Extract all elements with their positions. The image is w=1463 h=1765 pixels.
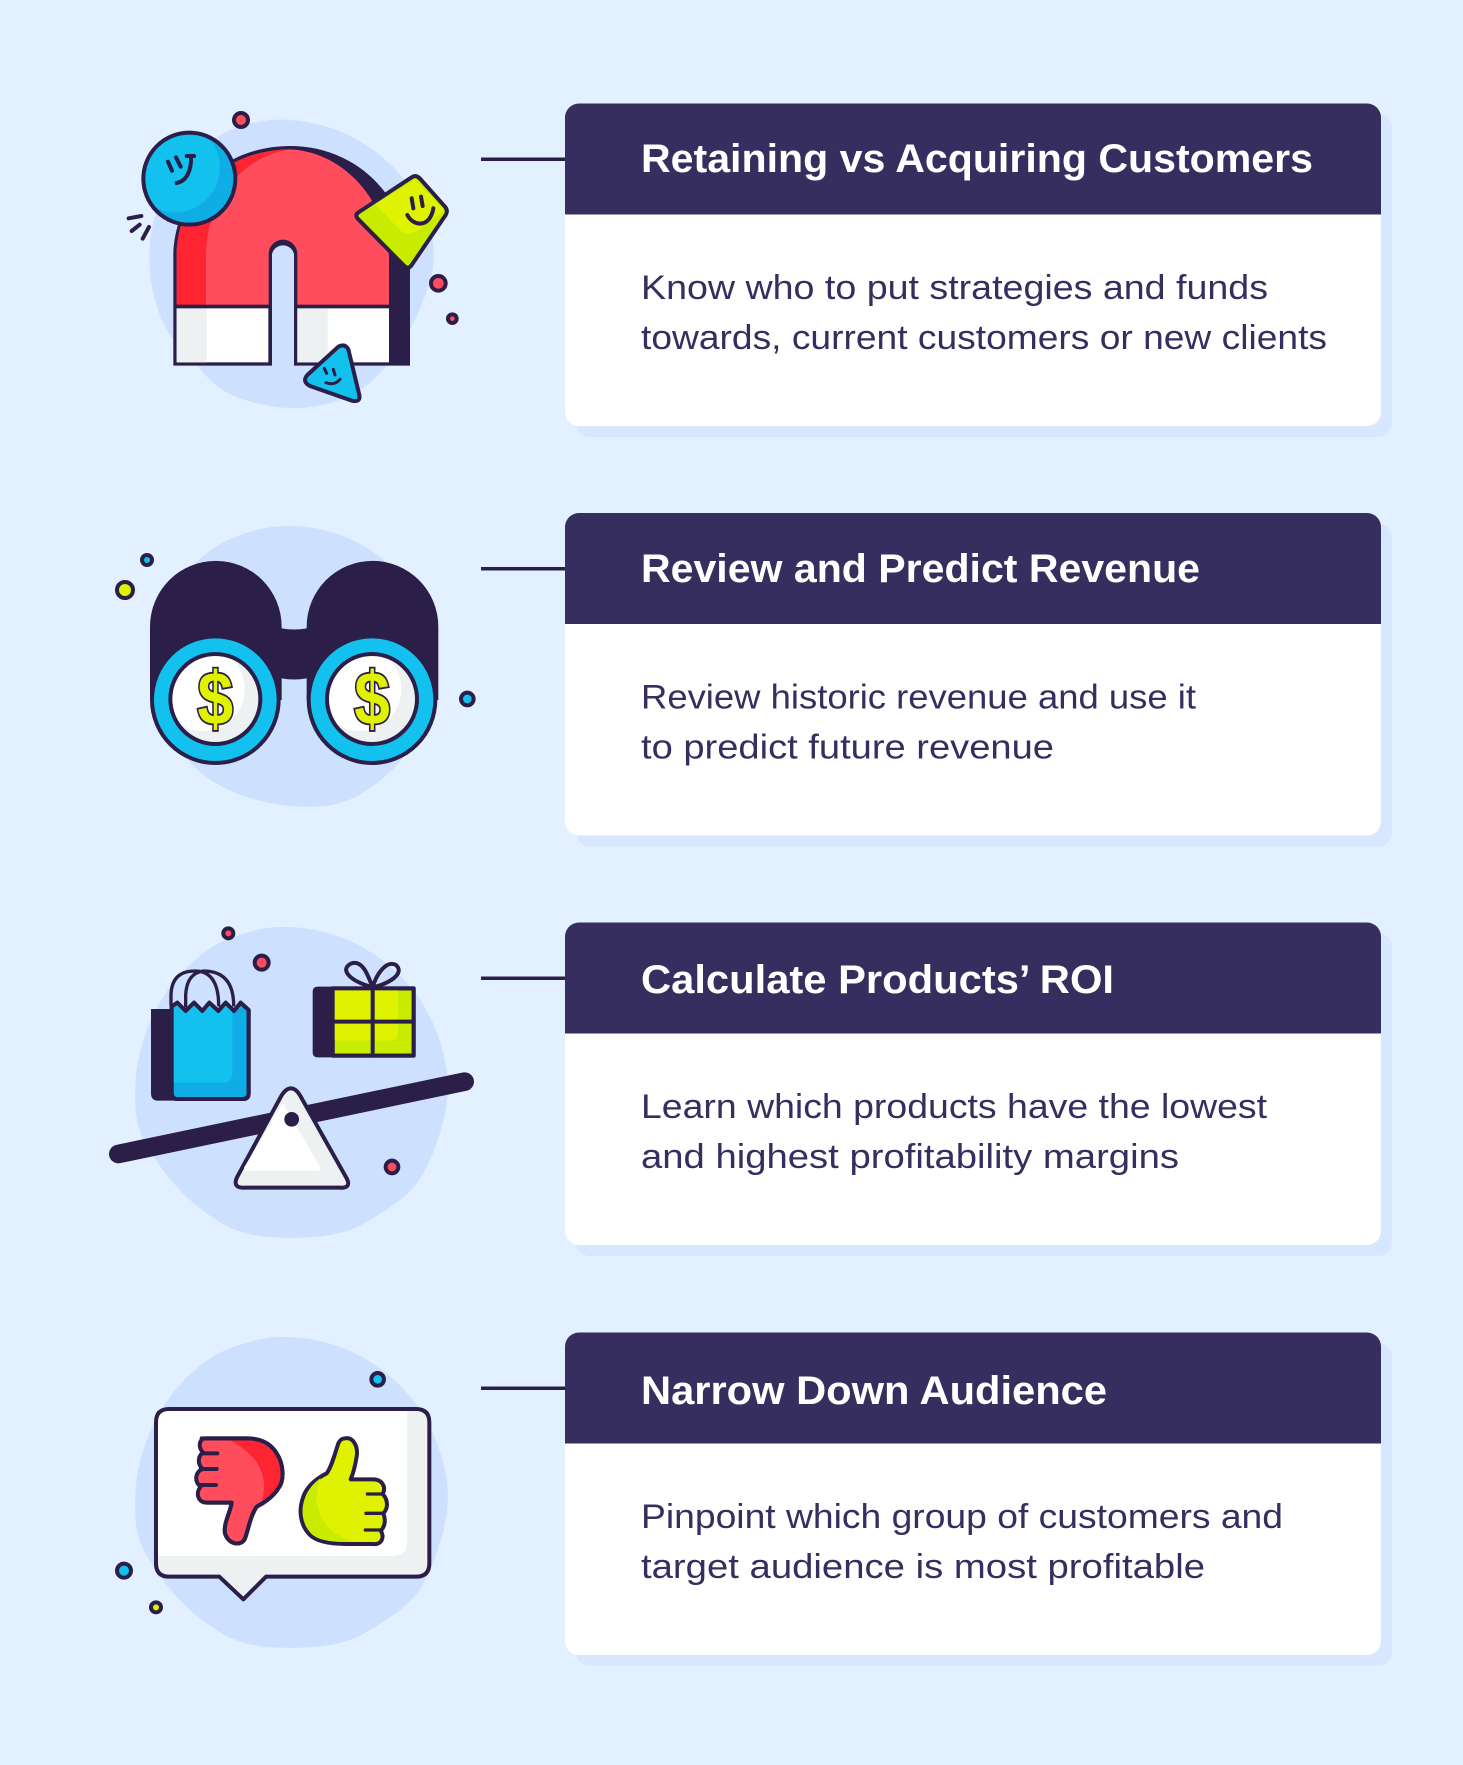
magnet right tip (297, 308, 389, 362)
seesaw fulcrum (236, 1088, 348, 1188)
body text: to predict future revenue (641, 728, 1054, 766)
heading: Narrow Down Audience (641, 1369, 1107, 1413)
blue smiling triangle (305, 345, 360, 401)
connector line 4 (481, 1386, 566, 1390)
magnet left tip (177, 308, 268, 362)
card body (565, 513, 1381, 836)
shopping bag (151, 971, 249, 1101)
icon: speech bubble with thumbs down and up (117, 1337, 448, 1648)
dollar sign: $ (354, 657, 390, 741)
gift ribbon (333, 988, 414, 1056)
heading: Review and Predict Revenue (641, 547, 1200, 591)
panel: retaining vs acquiring customers (565, 104, 1392, 437)
dollar sign: $ (198, 657, 233, 741)
body text: Review historic revenue and use it (641, 678, 1197, 716)
decorative dots (234, 113, 457, 323)
panel: narrow down audience (565, 1332, 1392, 1666)
magnet divider line right (296, 305, 391, 308)
icon background blob (149, 120, 434, 408)
panel: calculate products roi (565, 922, 1392, 1256)
card shadow (576, 524, 1392, 846)
card body (565, 1332, 1381, 1655)
seesaw plank (118, 1082, 465, 1154)
left lens (152, 636, 279, 763)
connector line 3 (481, 976, 566, 980)
card header (565, 922, 1381, 1034)
icon background blob (135, 1337, 448, 1648)
heading: Retaining vs Acquiring Customers (641, 137, 1313, 181)
bag handles (171, 971, 234, 1006)
gift bow (346, 963, 399, 987)
speech bubble (156, 1409, 429, 1599)
body text: Know who to put strategies and funds (641, 269, 1268, 307)
magnet red arch (177, 149, 389, 305)
body text: Learn which products have the lowest (641, 1088, 1268, 1126)
magnet divider line (175, 305, 270, 308)
blue smiling ball (141, 130, 238, 227)
card shadow (576, 933, 1392, 1256)
decorative dots (223, 928, 398, 1173)
binocular body (150, 561, 438, 700)
thumbs down (196, 1438, 283, 1544)
icon: magnet attracting smiling shapes (129, 113, 457, 408)
decorative dots (117, 555, 474, 705)
decorative dots (117, 1373, 384, 1612)
card shadow (576, 1343, 1392, 1666)
icon background blob (135, 927, 448, 1238)
thumbs up (301, 1438, 387, 1544)
icon: binoculars with dollar signs (117, 526, 474, 807)
right lens (309, 636, 435, 763)
card header (565, 513, 1381, 624)
card header (565, 104, 1381, 214)
body text: target audience is most profitable (641, 1548, 1205, 1586)
motion sparks (129, 216, 149, 239)
body text: and highest profitability margins (641, 1138, 1179, 1176)
card header (565, 1332, 1381, 1444)
card shadow (576, 114, 1392, 437)
magnet dark red side (177, 149, 290, 305)
icon background blob (153, 526, 432, 807)
yellow smiling diamond (356, 176, 447, 268)
body text: towards, current customers or new clients (641, 319, 1327, 357)
body text: Pinpoint which group of customers and (641, 1498, 1283, 1536)
panel: review and predict revenue (565, 513, 1392, 846)
gift box (313, 963, 414, 1057)
card body (565, 104, 1381, 426)
connector line 1 (481, 158, 566, 161)
card body (565, 922, 1381, 1245)
connector line 2 (481, 567, 566, 570)
heading: Calculate Products’ ROI (641, 958, 1114, 1002)
magnet shadow body (173, 146, 410, 366)
icon: seesaw balancing shopping bag and gift (118, 927, 465, 1238)
